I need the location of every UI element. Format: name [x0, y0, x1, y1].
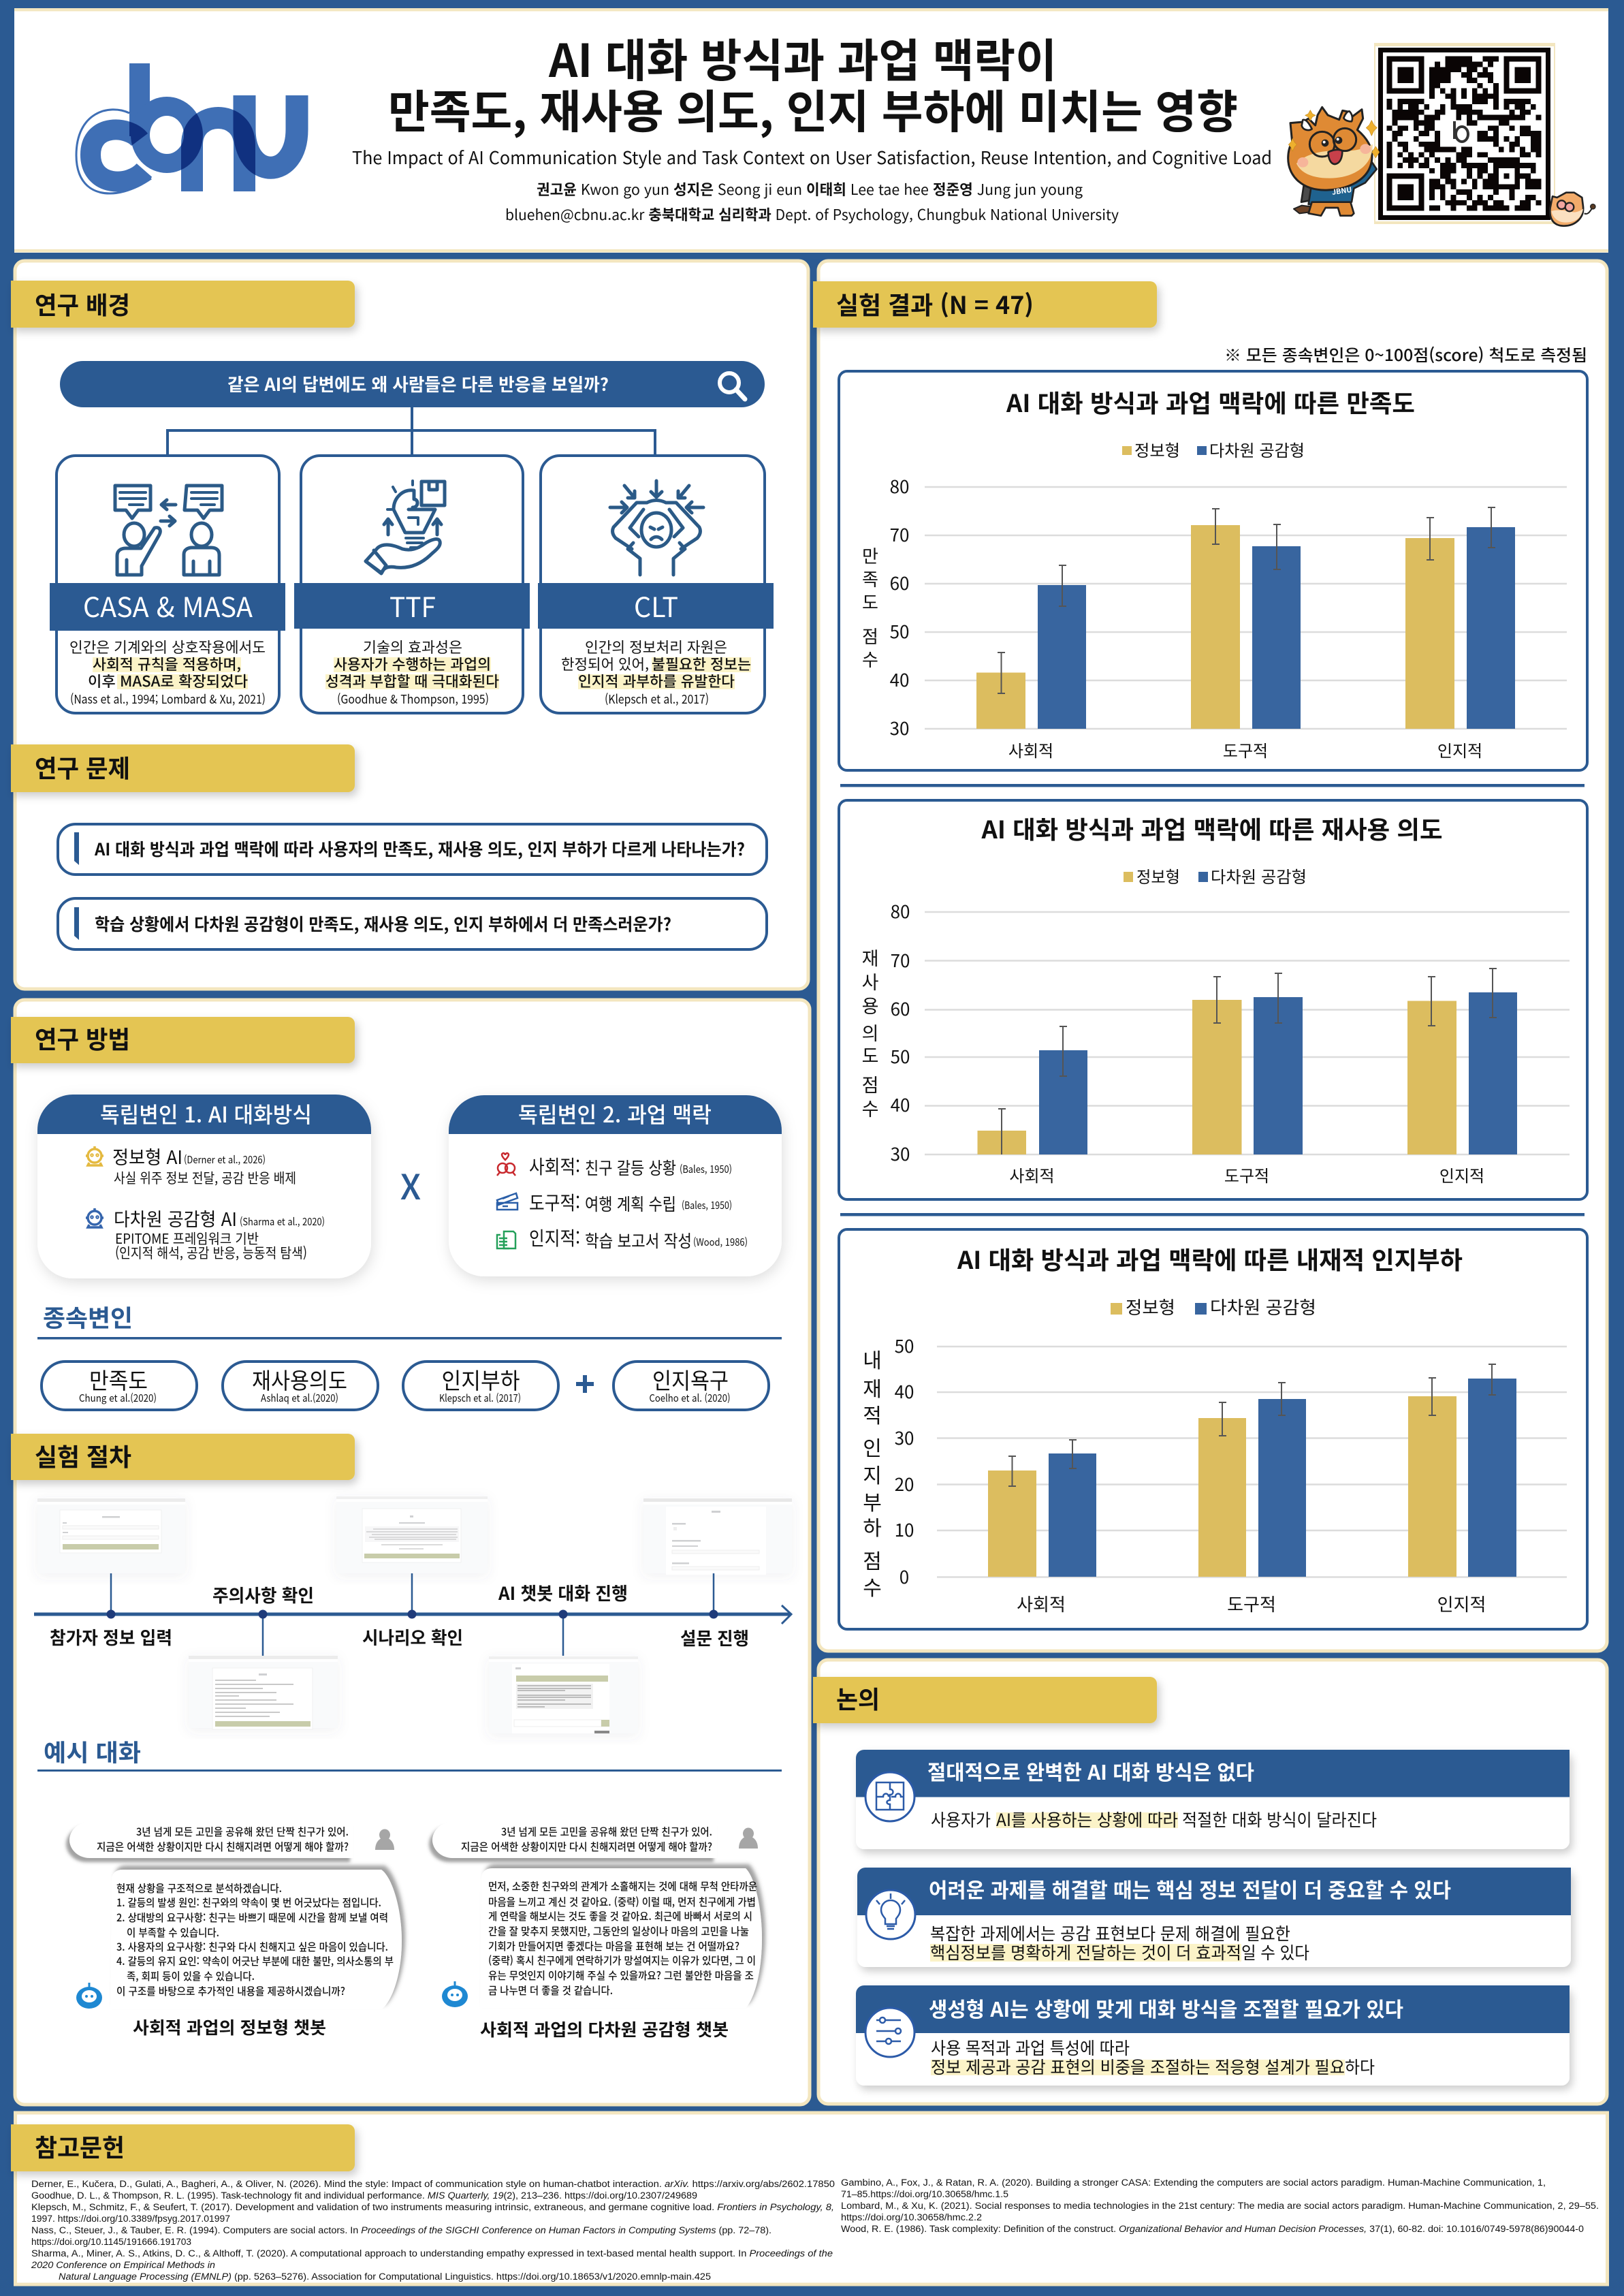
category labels: 사회적	[1008, 738, 1053, 761]
box: independent variable 2: 여행 계획 수립	[585, 1191, 676, 1216]
error bars	[998, 507, 1495, 693]
y axis title: 도	[862, 1041, 878, 1068]
example chat: empathic: 간을 잘 맞추지 못했지만, 그동안의 일상이나 마음의 고민을 나눌	[488, 1923, 749, 1938]
title: AI 대화 방식과 과업 맥락이	[548, 25, 1057, 91]
example chat: informational: 이 구조를 바탕으로 추가적인 내용을 제공하시겠습니까?	[116, 1983, 345, 1998]
legend: 다차원 공감형	[1211, 864, 1307, 887]
y axis title	[862, 944, 879, 1121]
card: TTF	[294, 456, 530, 713]
title: 만족도, 재사용 의도, 인지 부하에 미치는 영향	[388, 76, 1238, 142]
references: left column	[31, 2179, 835, 2282]
mascot: large	[1288, 107, 1380, 216]
card: TTF: (Goodhue & Thompson, 1995)	[337, 690, 489, 708]
references: right column: Wood, R. E. (1986). Task complexity: Definition of the construct. Organizational Behavior and Human Decision Processes, 37(1), 60-82. doi: 10.1016/0749-5978(86)90044-0	[841, 2224, 1584, 2234]
category labels	[1008, 738, 1482, 761]
screenshot: participant info	[37, 1498, 185, 1573]
discussion card 2	[857, 1868, 1571, 1967]
QR code	[1374, 43, 1555, 224]
connector lines	[168, 407, 655, 456]
card: CASA & MASA: CASA & MASA	[83, 586, 253, 625]
y axis title: 부	[863, 1486, 882, 1516]
card: TTF: 기술의 효과성은	[363, 636, 462, 657]
header banner	[14, 8, 1608, 253]
legend	[1122, 437, 1305, 461]
timeline labels: 설문 진행	[680, 1625, 749, 1650]
bars	[988, 1379, 1516, 1577]
chart: satisfaction: AI 대화 방식과 과업 맥락에 따른 만족도	[1006, 384, 1415, 420]
example chat: empathic: 3년 넘게 모든 고민을 공유해 왔던 단짝 친구가 있어.	[501, 1824, 712, 1839]
references: left column: Nass, C., Steuer, J., & Tauber, E. R. (1994). Computers are social actors. In Proceedings of the SIGCHI Conference on Human Factors in Computing Systems (pp. 72–78).	[31, 2225, 771, 2235]
card: TTF: TTF	[389, 586, 436, 625]
covariate: need for cognition: 인지욕구	[652, 1363, 729, 1396]
y axis title: 의	[862, 1019, 878, 1045]
panel: references	[11, 2113, 1607, 2284]
legend: 다차원 공감형	[1209, 437, 1305, 461]
discussion card 1: 사용자가	[931, 1807, 991, 1831]
box: independent variable 2: (Wood, 1986)	[693, 1235, 748, 1249]
timeline labels: 참가자 정보 입력	[50, 1624, 172, 1650]
example chat: informational: 족, 회피 등이 있을 수 있습니다.	[127, 1968, 255, 1983]
example chat: empathic: 지금은 어색한 상황이지만 다시 친해지려면 어떻게 해야 할까?	[461, 1839, 712, 1854]
screenshot: chatbot	[489, 1656, 638, 1733]
discussion card 2: 어려운 과제를 해결할 때는 핵심 정보 전달이 더 중요할 수 있다	[929, 1874, 1451, 1904]
subheading: dependent variables	[37, 1300, 782, 1339]
box: independent variable 1: 다차원 공감형 AI	[114, 1205, 237, 1231]
y axis title: 도	[862, 589, 878, 614]
mascot: small	[1550, 193, 1595, 226]
title	[388, 25, 1238, 142]
chart: reuse intention	[839, 800, 1587, 1199]
heading: results	[813, 281, 1157, 328]
example chat: informational: 1. 갈등의 발생 원인: 친구와의 약속이 몇 번 어긋났다는 점입니다.	[116, 1895, 381, 1910]
box: independent variable 1: (Derner et al., 2026)	[184, 1152, 266, 1167]
assistant bubble	[480, 1868, 762, 2008]
discussion card 3: 하다	[1345, 2054, 1375, 2079]
discussion card 2: 일 수 있다	[1241, 1940, 1309, 1964]
card: CLT: 불필요한 정보는	[652, 653, 751, 674]
references: left column: Goodhue, D. L., & Thompson, R. L. (1995). Task-technology fit and individual performance. MIS Quarterly, 19 (2), 213–236. https://doi.org/10.2307/249689	[31, 2190, 697, 2201]
y axis labels: 30	[895, 1425, 914, 1450]
y axis title: 용	[862, 992, 878, 1018]
y axis labels: 50	[891, 1043, 910, 1069]
subheading: dependent variables: 종속변인	[43, 1300, 133, 1334]
category labels: 인지적	[1437, 1591, 1486, 1616]
example chat: empathic	[432, 1822, 762, 2041]
category labels: 도구적	[1227, 1591, 1276, 1616]
y axis labels: 50	[890, 618, 909, 644]
example chat: empathic: 먼저, 소중한 친구와의 관계가 소홀해지는 것에 대해 무척 안타까운	[488, 1878, 757, 1893]
category labels: 사회적	[1009, 1163, 1055, 1186]
y axis title: 지	[863, 1459, 882, 1489]
legend	[1124, 864, 1307, 887]
example chat: empathic: 유는 무엇인지 이야기해 주실 수 있을까요? 그런 불안한 마음을 조	[488, 1968, 754, 1983]
y axis title	[862, 543, 878, 672]
research question 2	[58, 898, 767, 949]
error bars	[998, 969, 1497, 1154]
discussion card 1	[856, 1750, 1570, 1849]
band: CASA & MASA	[50, 583, 285, 631]
error bars	[1008, 1364, 1496, 1486]
y axis labels: 40	[890, 667, 909, 692]
references: right column: 71–85.https://doi.org/10.30658/hmc.1.5	[841, 2189, 1008, 2199]
cross symbol: X	[400, 1159, 421, 1210]
card: CASA & MASA: 인간은 기계와의 상호작용에서도	[69, 636, 266, 657]
discussion card 2: 핵심정보를 명확하게 전달하는 것이 더 효과적	[930, 1940, 1241, 1964]
bars	[976, 525, 1515, 729]
card: CASA & MASA: 이후 MASA로 확장되었다	[88, 670, 248, 691]
box: independent variable 2: 친구 갈등 상황	[585, 1155, 676, 1180]
dependent variable: cognitive load: Klepsch et al. (2017)	[439, 1391, 521, 1405]
example chat: empathic: 기회가 만들어지면 좋겠다는 마음을 표현해 보는 건 어떨까요?	[488, 1938, 739, 1953]
question search bar: 같은 AI의 답변에도 왜 사람들은 다른 반응을 보일까?	[227, 371, 609, 396]
references: left column: 1997. https://doi.org/10.3389/fpsyg.2017.01997	[31, 2214, 230, 2224]
timeline labels: AI 챗봇 대화 진행	[498, 1580, 628, 1605]
y axis labels	[895, 1333, 914, 1589]
screenshot: scenario	[336, 1496, 488, 1573]
qr centre logo	[1454, 121, 1468, 142]
card: CLT: (Klepsch et al., 2017)	[605, 690, 709, 708]
discussion card 3: 정보 제공과 공감 표현의 비중을 조절하는 적응형 설계가 필요	[931, 2054, 1345, 2079]
legend: 정보형	[1134, 437, 1180, 461]
y axis labels	[890, 473, 909, 740]
y axis title: 점	[862, 1071, 878, 1097]
card: CASA & MASA	[50, 456, 285, 713]
icon: user	[375, 1829, 394, 1850]
references: right column	[841, 2177, 1599, 2234]
card: CLT: 한정되어 있어,	[561, 653, 649, 674]
timeline	[34, 1573, 791, 1656]
discussion card 1: 절대적으로 완벽한 AI 대화 방식은 없다	[927, 1756, 1254, 1786]
heading: discussion: 논의	[836, 1680, 880, 1716]
category labels	[1009, 1163, 1484, 1186]
example chat: empathic: 게 연락을 해보시는 것도 좋을 것 같아요. 최근에 바빠서 서로의 시	[488, 1908, 752, 1923]
card: CLT: 인간의 정보처리 자원은	[585, 636, 727, 657]
box: independent variable 2: 독립변인 2. 과업 맥락	[518, 1098, 712, 1129]
discussion card 2: 복잡한 과제에서는 공감 표현보다 문제 해결에 필요한	[930, 1921, 1290, 1945]
covariate: need for cognition: Coelho et al. (2020)	[650, 1391, 730, 1405]
category labels: 인지적	[1437, 738, 1482, 761]
example chat: informational	[69, 1822, 402, 2039]
discussion card 1: AI를 사용하는 상황에 따라	[996, 1807, 1178, 1831]
references: right column: Lombard, M., & Xu, K. (2021). Social responses to media technologies in the 21st century: The media are social actors paradigm. Human-Machine Communication, 2, 29–55.	[841, 2201, 1599, 2211]
icon: sliders	[865, 2008, 914, 2057]
card: CLT	[538, 456, 774, 713]
box: independent variable 1: 정보형 AI	[112, 1143, 182, 1169]
card: CLT: CLT	[634, 586, 678, 625]
category labels: 인지적	[1439, 1163, 1484, 1186]
y axis labels: 40	[891, 1092, 910, 1117]
y axis labels: 40	[895, 1379, 914, 1404]
y axis labels: 20	[895, 1471, 914, 1496]
discussion card 1: 적절한 대화 방식이 달라진다	[1182, 1807, 1377, 1831]
timeline labels	[50, 1580, 749, 1650]
box: independent variable 1: EPITOME 프레임워크 기반	[115, 1227, 259, 1248]
y axis title: 인	[863, 1432, 882, 1462]
box: independent variable 1: 사실 위주 정보 전달, 공감 반응 배제	[114, 1167, 296, 1187]
y axis labels: 0	[899, 1564, 909, 1589]
y axis title: 수	[862, 646, 878, 672]
icon: puzzle	[865, 1772, 914, 1821]
references: left column: 2020 Conference on Empirical Methods in	[31, 2260, 215, 2270]
panel: results	[813, 261, 1607, 1651]
references: right column: Gambino, A., Fox, J., & Ratan, R. A. (2020). Building a stronger CASA: Extending the computers are social actors paradigm. Human-Machine Communication, 1,	[841, 2177, 1546, 2188]
dependent variable: satisfaction	[42, 1362, 197, 1410]
icon: overloaded person	[610, 481, 703, 575]
plus symbol	[576, 1375, 594, 1393]
card: TTF: 사용자가 수행하는 과업의	[334, 653, 491, 674]
icon: lightbulb	[866, 1890, 915, 1939]
subheading: example dialog: 예시 대화	[44, 1734, 141, 1769]
icon: social	[497, 1153, 515, 1176]
category labels: 도구적	[1224, 1163, 1269, 1186]
y axis labels: 60	[891, 996, 910, 1021]
discussion card 3: 생성형 AI는 상황에 맞게 대화 방식을 조절할 필요가 있다	[929, 1993, 1403, 2023]
heading: discussion	[813, 1677, 1157, 1723]
y axis title: 내	[863, 1344, 882, 1374]
dependent variable: satisfaction: Chung et al.(2020)	[79, 1391, 157, 1405]
dependent variable: cognitive load: 인지부하	[441, 1363, 520, 1396]
example chat: empathic: 마음을 느끼고 계신 것 같아요. (중략) 이럴 때, 먼저 친구에게 가볍	[488, 1894, 756, 1909]
chart: satisfaction	[839, 371, 1587, 770]
university logo	[76, 63, 297, 193]
legend: 다차원 공감형	[1210, 1294, 1316, 1319]
y axis labels: 10	[895, 1517, 914, 1542]
y axis labels: 80	[891, 898, 910, 924]
band: TTF	[294, 583, 530, 629]
example chat: informational: 현재 상황을 구조적으로 분석하겠습니다.	[116, 1881, 282, 1896]
y axis title: 만	[862, 543, 878, 568]
icon: cognitive	[497, 1231, 515, 1248]
discussion card 3	[856, 1985, 1570, 2086]
y axis labels	[891, 898, 910, 1166]
category labels	[1017, 1591, 1486, 1616]
heading: research questions: 연구 문제	[35, 749, 130, 785]
y axis title: 적	[863, 1399, 882, 1429]
measurement note: ※ 모든 종속변인은 0~100점(score) 척도로 측정됨	[1224, 342, 1587, 366]
y axis labels: 70	[891, 947, 910, 973]
dependent variable: cognitive load	[403, 1362, 558, 1410]
affiliation: bluehen@cbnu.ac.kr 충북대학교 심리학과 Dept. of Psychology, Chungbuk National University	[505, 204, 1119, 225]
y axis title: 수	[862, 1095, 878, 1121]
box: independent variable 1: 독립변인 1. AI 대화방식	[100, 1098, 312, 1129]
research question 1	[58, 824, 767, 875]
example chat: empathic: (중략) 혹시 친구에게 연락하기가 망설여지는 이유가 있다면, 그 이	[488, 1953, 756, 1968]
heading: references: 참고문헌	[35, 2128, 125, 2164]
example chat: informational: 3년 넘게 모든 고민을 공유해 왔던 단짝 친구가 있어.	[136, 1824, 349, 1839]
panel: research background	[11, 261, 808, 989]
heading: methods: 연구 방법	[35, 1020, 130, 1056]
y axis title: 재	[863, 1372, 882, 1402]
dependent variable: reuse intention	[223, 1362, 378, 1410]
icon: gold robot	[86, 1146, 104, 1165]
box: independent variable 2: 도구적:	[529, 1189, 580, 1216]
timeline labels: 시나리오 확인	[362, 1624, 463, 1650]
research question 1: AI 대화 방식과 과업 맥락에 따라 사용자의 만족도, 재사용 의도, 인지 부하가 다르게 나타나는가?	[94, 836, 745, 861]
icon: blue robot	[86, 1208, 104, 1227]
screenshot: notice	[189, 1656, 338, 1729]
box: independent variable 2	[449, 1095, 782, 1276]
references: left column: Derner, E., Kučera, D., Gulati, A., Bagheri, A., & Oliver, N. (2026). Mind the style: Impact of communication style on human-chatbot interaction. arXiv. https://arxiv.org/abs/2602.17850	[31, 2179, 835, 2189]
example chat: informational: 사회적 과업의 정보형 챗봇	[133, 2015, 326, 2039]
dependent variable: reuse intention: Ashlaq et al.(2020)	[261, 1391, 338, 1405]
y axis title: 점	[863, 1545, 882, 1575]
box: independent variable 2: 사회적:	[529, 1152, 580, 1180]
timeline labels: 주의사항 확인	[212, 1582, 314, 1607]
band: CLT	[538, 583, 774, 629]
box: independent variable 1	[37, 1095, 371, 1278]
heading: procedure: 실험 절차	[35, 1438, 131, 1473]
heading: research questions	[11, 744, 355, 792]
dependent variable: satisfaction: 만족도	[89, 1363, 148, 1396]
dependent variable: reuse intention: 재사용의도	[252, 1363, 347, 1396]
assistant bubble	[110, 1870, 402, 2009]
y axis title: 재	[862, 944, 878, 971]
box: independent variable 2: (Bales, 1950)	[680, 1162, 732, 1176]
box: independent variable 2: (Bales, 1950)	[682, 1198, 732, 1212]
icon: user	[739, 1828, 758, 1849]
user bubble	[432, 1822, 717, 1858]
legend	[1111, 1294, 1316, 1319]
discussion card 3: 사용 목적과 과업 특성에 따라	[931, 2035, 1130, 2060]
box: independent variable 2: 학습 보고서 작성	[585, 1228, 692, 1253]
example chat: empathic: 사회적 과업의 다차원 공감형 챗봇	[480, 2017, 729, 2041]
example chat: empathic: 금 나누면 더 좋을 것 같습니다.	[488, 1983, 613, 1998]
example chat: informational: 지금은 어색한 상황이지만 다시 친해지려면 어떻게 해야 할까?	[97, 1839, 349, 1854]
legend: 정보형	[1136, 864, 1180, 887]
legend: 정보형	[1126, 1294, 1175, 1319]
heading: research background: 연구 배경	[35, 286, 130, 321]
box: independent variable 2: 인지적:	[529, 1224, 580, 1251]
english subtitle: The Impact of AI Communication Style and Task Context on User Satisfaction, Reuse Intention, and Cognitive Load	[352, 144, 1272, 170]
authors: 권고윤 Kwon go yun 성지은 Seong ji eun 이태희 Lee tae hee 정준영 Jung jun young	[537, 178, 1083, 200]
heading: procedure	[11, 1434, 355, 1480]
icon: hand holding lightbulb puzzle	[366, 481, 445, 573]
chart: intrinsic cognitive load: AI 대화 방식과 과업 맥락에 따른 내재적 인지부하	[957, 1241, 1463, 1276]
subheading: example dialog	[37, 1734, 782, 1772]
y axis labels: 60	[890, 570, 909, 595]
y axis title: 점	[862, 623, 878, 648]
icon: bot	[69, 1979, 110, 2019]
heading: results: 실험 결과 (N = 47)	[836, 286, 1034, 321]
example chat: informational: 2. 상대방의 요구사항: 친구는 바쁘기 때문에 시간을 함께 보낼 여력	[116, 1910, 388, 1925]
y axis labels: 80	[890, 473, 909, 499]
y axis labels: 50	[895, 1333, 914, 1358]
references: left column: Sharma, A., Miner, A. S., Atkins, D. C., & Althoff, T. (2020). A computational approach to understanding empathy expressed in text-based mental health support. In Proceedings of the	[31, 2248, 833, 2259]
covariate: need for cognition	[614, 1362, 769, 1410]
y axis title: 하	[863, 1511, 882, 1541]
user bubble	[69, 1822, 353, 1858]
heading: methods	[11, 1017, 355, 1063]
y axis title	[863, 1344, 882, 1601]
card: CLT: 인지적 과부하를 유발한다	[578, 670, 735, 691]
y axis labels: 70	[890, 522, 909, 547]
references: right column: https://doi.org/10.30658/hmc.2.2	[841, 2212, 982, 2222]
y axis labels: 30	[891, 1141, 910, 1166]
references: left column: https://doi.org/10.1145/191666.191703	[31, 2237, 191, 2247]
references: left column: Natural Language Processing (EMNLP) (pp. 5263–5276). Association for Computational Linguistics. https://doi.org/10.18653/v1/2020.emnlp-main.425	[59, 2271, 711, 2282]
category labels: 도구적	[1223, 738, 1268, 761]
box: independent variable 1: (인지적 해석, 공감 반응, 능동적 탐색)	[115, 1242, 307, 1262]
screenshot: survey	[643, 1498, 792, 1575]
category labels: 사회적	[1017, 1591, 1066, 1616]
y axis title: 사	[862, 968, 879, 994]
icon: tool	[497, 1193, 518, 1210]
heading: references	[11, 2124, 355, 2171]
example chat: informational: 이 부족할 수 있습니다.	[127, 1925, 219, 1940]
bars	[978, 992, 1517, 1154]
chart: intrinsic cognitive load	[839, 1229, 1587, 1629]
icon: two people chatting	[115, 486, 222, 575]
chart: reuse intention: AI 대화 방식과 과업 맥락에 따른 재사용 의도	[981, 811, 1442, 846]
panel: discussion	[813, 1660, 1607, 2104]
heading: research background	[11, 281, 355, 328]
y axis labels: 30	[890, 715, 909, 740]
example chat: informational: 4. 갈등의 유지 요인: 약속이 어긋난 부분에 대한 불만, 의사소통의 부	[116, 1953, 394, 1968]
y axis title: 수	[863, 1571, 882, 1601]
references: left column: Klepsch, M., Schmitz, F., & Seufert, T. (2017). Development and validation of two instruments measuring intrinsic, extraneous, and germane cognitive load. Frontiers in Psychology, 8,	[31, 2202, 834, 2212]
card: TTF: 성격과 부합할 때 극대화된다	[325, 670, 499, 691]
card: CASA & MASA: 사회적 규칙을 적용하며,	[93, 653, 241, 674]
icon: bot	[439, 1981, 471, 2013]
mascot: large: JBNU	[1331, 185, 1352, 198]
y axis title: 족	[862, 566, 878, 591]
example chat: informational: 3. 사용자의 요구사항: 친구와 다시 친해지고 싶은 마음이 있습니다.	[116, 1939, 388, 1954]
box: independent variable 1: (Sharma et al., 2020)	[240, 1214, 325, 1229]
question search bar	[60, 361, 765, 407]
research question 2: 학습 상황에서 다차원 공감형이 만족도, 재사용 의도, 인지 부하에서 더 만족스러운가?	[95, 911, 671, 936]
card: CASA & MASA: (Nass et al., 1994; Lombard & Xu, 2021)	[70, 690, 266, 708]
panel: methods	[11, 1000, 810, 2105]
